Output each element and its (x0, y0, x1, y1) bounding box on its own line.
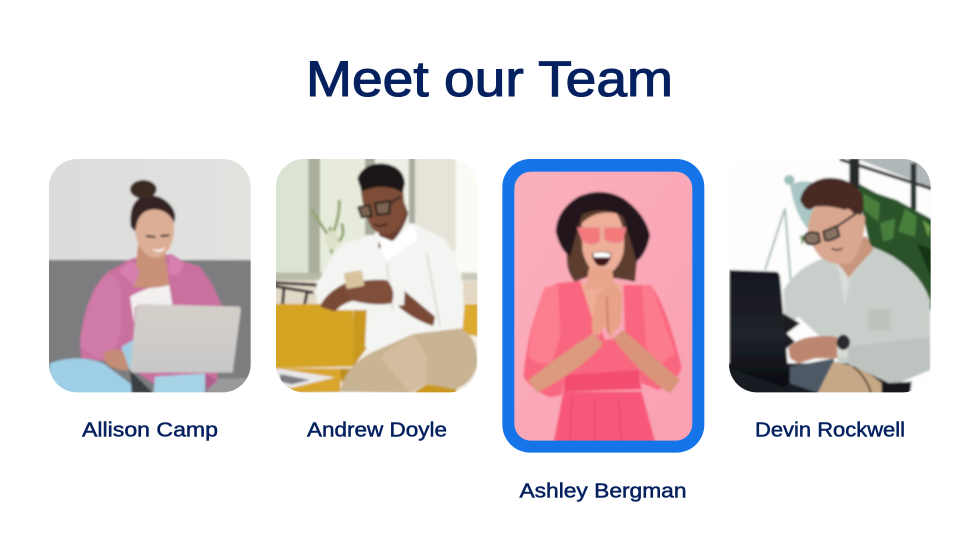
panel: Allison Camp (47, 157, 253, 442)
name: Devin Rockwell (755, 420, 905, 442)
panel: Devin Rockwell (727, 157, 933, 442)
panel: Ashley Bergman (highlighted) (502, 159, 704, 502)
photo: man typing on laptop (727, 157, 933, 397)
blue frame (502, 159, 704, 453)
photo: excited woman in pink dress (502, 159, 704, 453)
photo: woman with laptop on sofa (47, 157, 253, 395)
photo: man with phone on yellow sofa (273, 157, 480, 397)
name: Andrew Doyle (307, 420, 447, 442)
panel: Andrew Doyle (273, 157, 480, 442)
name: Ashley Bergman (520, 480, 686, 502)
title: Meet our Team (306, 51, 673, 107)
name: Allison Camp (82, 420, 218, 442)
